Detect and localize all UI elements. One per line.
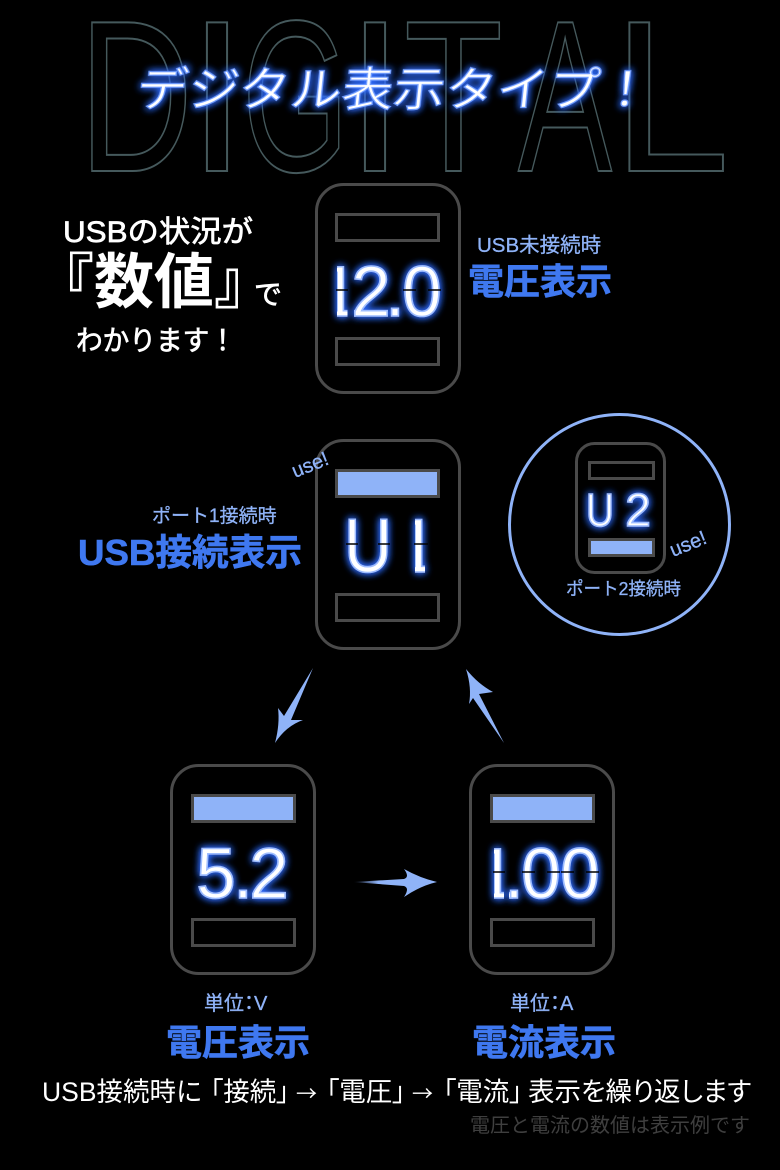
panel: current display: 1.00 xyxy=(476,835,600,914)
panel: port 2 callout: use! xyxy=(667,527,710,562)
caption: → xyxy=(296,1078,317,1108)
label: current unit xyxy=(472,992,616,1063)
label: port 1 connected xyxy=(78,505,302,573)
label: port 1 connected: ポート1接続時 xyxy=(152,505,277,527)
caption: 「接続」 xyxy=(210,1077,290,1107)
panel: USB connection display: U xyxy=(344,504,392,589)
title: デジタル表示タイプ！ xyxy=(134,63,655,116)
caption: 表示を繰り返します xyxy=(528,1077,751,1107)
label: port 1 connected: USB接続表示 xyxy=(78,532,302,573)
intro text: わかります！ xyxy=(76,325,236,356)
caption: USB接続時に xyxy=(42,1077,202,1107)
panel: port 2 callout: U xyxy=(586,484,614,536)
arrow: USB to voltage xyxy=(275,668,313,743)
intro text: で xyxy=(254,279,282,310)
label: voltage unit xyxy=(166,992,310,1063)
panel: voltage display when USB not connected: 12.0 xyxy=(319,253,442,332)
intro text: USBの状況が xyxy=(63,216,253,249)
panel: voltage display xyxy=(172,766,314,974)
arrow: voltage to current xyxy=(353,869,437,897)
label: voltage unit: 電圧表示 xyxy=(166,1022,310,1063)
panel: voltage display when USB not connected xyxy=(316,184,460,392)
use tag: port 1: use! xyxy=(289,448,332,483)
panel: voltage display: 5.2 xyxy=(196,835,289,914)
panel: port 2 callout: 2 xyxy=(625,484,651,536)
label: voltage unit: 単位：V xyxy=(204,992,268,1015)
panel: port 2 callout: ポート2接続時 xyxy=(566,579,681,599)
intro text: 『数値』 xyxy=(34,249,274,316)
panel: port 2 callout xyxy=(510,414,730,634)
panel: USB connection display xyxy=(316,440,460,648)
label: USB not connected: USB未接続時 xyxy=(477,234,601,257)
label: USB not connected: 電圧表示 xyxy=(468,261,612,302)
panel: current display xyxy=(470,766,614,974)
intro text xyxy=(34,216,282,356)
label: current unit: 単位：A xyxy=(510,992,574,1015)
panel: USB connection display: 1 xyxy=(396,504,438,589)
label: current unit: 電流表示 xyxy=(472,1022,616,1063)
arrow: current to USB xyxy=(466,669,504,743)
caption: → xyxy=(412,1078,433,1108)
footnote: 電圧と電流の数値は表示例です xyxy=(470,1114,750,1137)
caption: 「電圧」 xyxy=(326,1077,406,1107)
background word: DIGITAL xyxy=(79,0,730,217)
label: USB not connected xyxy=(468,234,612,302)
caption: 「電流」 xyxy=(443,1077,522,1107)
